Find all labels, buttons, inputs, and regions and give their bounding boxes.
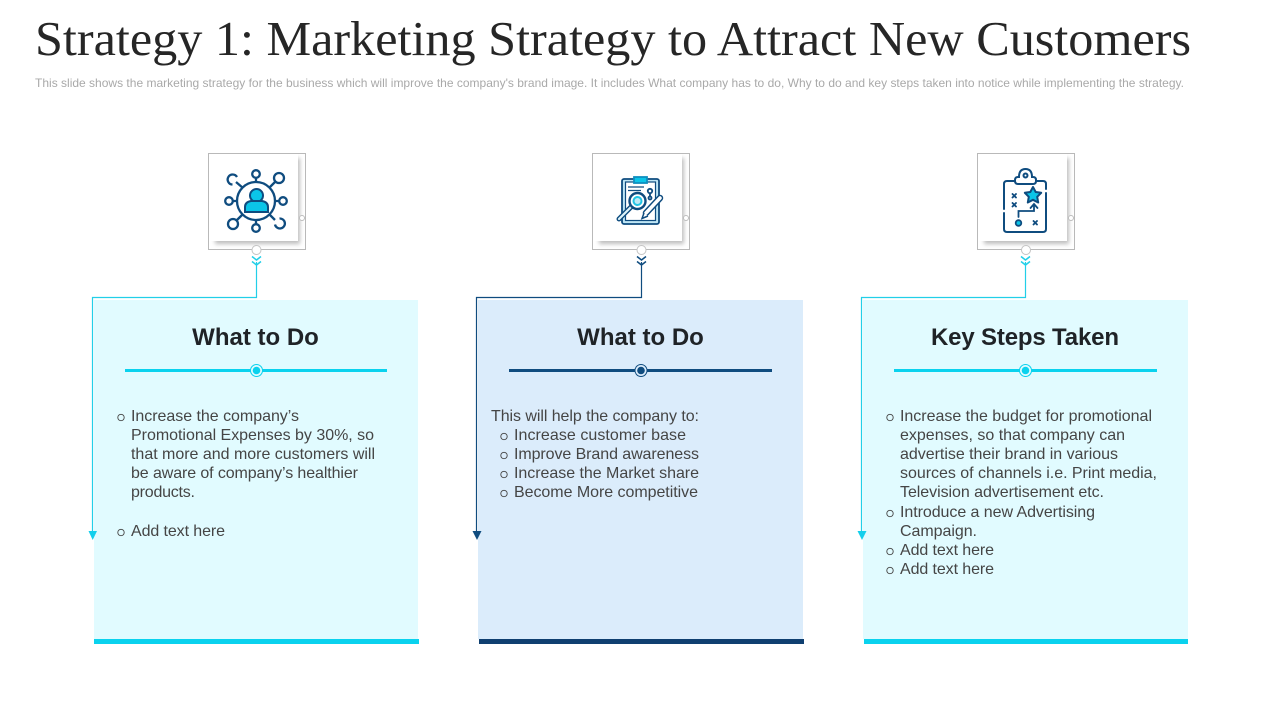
body text: Become More competitive xyxy=(514,484,698,501)
icon: clipboard xyxy=(619,177,660,224)
body text: Add text here xyxy=(131,523,225,540)
panel bottom bar xyxy=(864,639,1188,644)
panel background xyxy=(94,300,418,639)
divider with dot xyxy=(125,364,387,376)
connector arrow xyxy=(88,262,256,540)
panel: what to do (middle) xyxy=(472,154,804,644)
body text xyxy=(118,408,375,540)
panel: key steps taken xyxy=(858,154,1188,644)
body text: sources of channels i.e. Print media, xyxy=(900,465,1157,482)
divider with dot xyxy=(894,364,1157,376)
icon: strategy board xyxy=(1004,169,1046,232)
body text: Promotional Expenses by 30%, so xyxy=(131,427,374,444)
heading: What to Do xyxy=(577,324,704,351)
title: Strategy 1: Marketing Strategy to Attract New Customers xyxy=(35,11,1191,66)
body text: Increase the company’s xyxy=(131,408,299,425)
body text: Add text here xyxy=(900,542,994,559)
heading: What to Do xyxy=(192,324,319,351)
panel background xyxy=(478,300,803,639)
subtitle: This slide shows the marketing strategy for the business which will improve the company's brand image. It includes What company has to do, Why to do and key steps taken into notice while implementing the strategy. xyxy=(35,76,1184,90)
body text: expenses, so that company can xyxy=(900,427,1125,444)
heading: Key Steps Taken xyxy=(931,324,1119,351)
body text: be aware of company’s healthier xyxy=(131,465,359,482)
body text xyxy=(887,408,1157,578)
body text: Improve Brand awareness xyxy=(514,446,699,463)
panel bottom bar xyxy=(94,639,419,644)
body text: that more and more customers will xyxy=(131,446,375,463)
body text: Introduce a new Advertising xyxy=(900,504,1095,521)
connector arrow xyxy=(472,262,642,540)
body text: Campaign. xyxy=(900,523,977,540)
divider with dot xyxy=(509,364,772,376)
panel background xyxy=(863,300,1188,639)
icon card: network person xyxy=(208,154,306,265)
connector arrow xyxy=(858,262,1026,540)
body text: Add text here xyxy=(900,561,994,578)
body text: Television advertisement etc. xyxy=(900,484,1104,501)
body text: Increase customer base xyxy=(514,427,686,444)
body text: This will help the company to: xyxy=(491,408,699,425)
body text: advertise their brand in various xyxy=(900,446,1118,463)
body text: Increase the Market share xyxy=(514,465,699,482)
body text xyxy=(491,408,699,501)
panel: what to do (left) xyxy=(88,154,419,644)
icon: person network xyxy=(225,170,287,232)
body text: products. xyxy=(131,484,195,501)
panel bottom bar xyxy=(479,639,804,644)
icon card: clipboard magnifier xyxy=(592,154,690,265)
icon card: strategy clipboard xyxy=(978,154,1074,265)
body text: Increase the budget for promotional xyxy=(900,408,1152,425)
